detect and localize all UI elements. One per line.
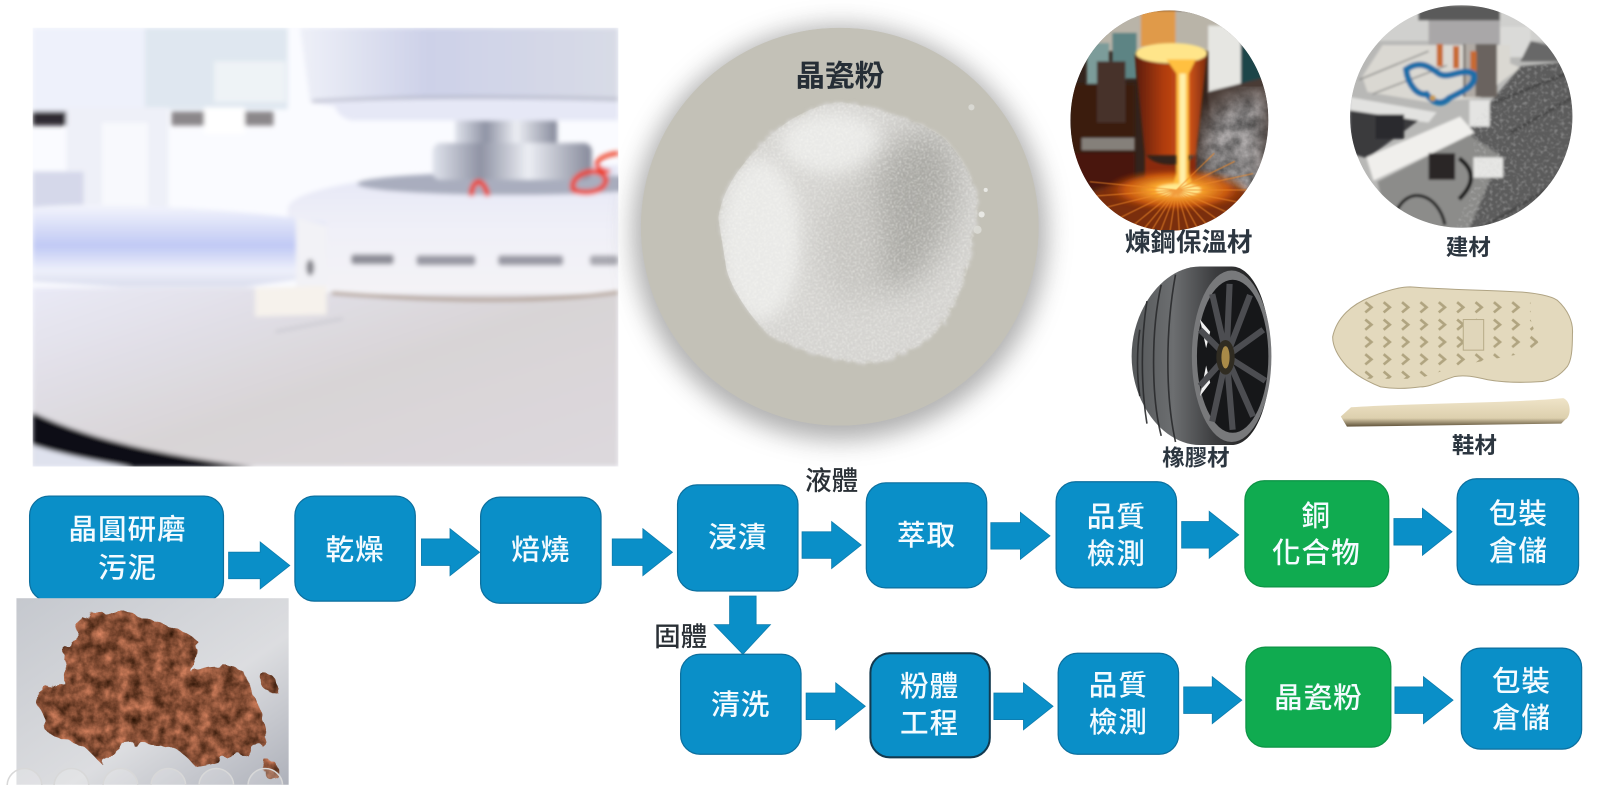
arrow: leaching down to washing	[714, 596, 770, 654]
step: copper compound: 化合物	[1272, 537, 1361, 569]
step: leaching	[678, 485, 798, 591]
photo: CNC machine circle	[1350, 5, 1573, 230]
step: drying: 乾燥	[326, 534, 385, 566]
step: quality inspection upper	[1056, 482, 1177, 588]
step: packaging lower: 倉儲	[1492, 703, 1551, 735]
arrow: crystal powder to packaging	[1395, 677, 1453, 724]
step: quality inspection lower: 品質	[1089, 670, 1148, 702]
step: packaging upper: 倉儲	[1489, 535, 1548, 567]
step: copper compound	[1245, 481, 1389, 587]
step: drying	[295, 496, 415, 601]
sparks	[1090, 153, 1257, 235]
photo: crystal ceramic powder circle	[633, 26, 1047, 440]
step: copper compound: 銅	[1302, 501, 1331, 533]
step: wafer grinding sludge: 污泥	[98, 553, 157, 585]
label: shoe material: 鞋材	[1452, 433, 1497, 458]
label: powder title: 晶瓷粉	[795, 60, 885, 93]
step: packaging lower	[1461, 648, 1582, 749]
arrow: inspection to copper compound	[1182, 511, 1239, 558]
arrow: washing to powder engineering	[806, 683, 865, 730]
step: packaging upper	[1457, 479, 1579, 585]
arrow: roasting to leaching	[612, 529, 672, 576]
step: packaging upper: 包裝	[1489, 499, 1548, 531]
label: rubber material: 橡膠材	[1162, 445, 1230, 470]
label: solid: 固體	[654, 622, 707, 652]
step: quality inspection upper: 品質	[1087, 502, 1146, 534]
step: crystal ceramic powder: 晶瓷粉	[1274, 682, 1363, 714]
label: building material: 建材	[1446, 235, 1491, 260]
photo: shoe sole	[1333, 287, 1573, 427]
arrow: powder engineering to inspection	[994, 683, 1053, 730]
step: extraction: 萃取	[897, 520, 956, 552]
slide viewer toolbar	[7, 769, 283, 785]
step: powder engineering	[870, 653, 990, 757]
step: quality inspection lower	[1058, 653, 1179, 754]
arrow: extraction to inspection	[991, 512, 1050, 559]
step: roasting: 焙燒	[511, 534, 570, 566]
step: wafer grinding sludge	[30, 496, 223, 601]
step: crystal ceramic powder	[1246, 647, 1391, 747]
step: powder engineering: 工程	[900, 708, 959, 740]
step: extraction	[866, 483, 987, 588]
photo: tire	[1132, 266, 1271, 445]
arrow: drying to roasting	[421, 529, 480, 576]
step: washing	[681, 654, 801, 754]
photo: sludge sample	[16, 598, 289, 785]
step: wafer grinding sludge: 晶圓研磨	[68, 514, 187, 546]
photo: steel pouring circle	[1070, 10, 1268, 231]
label: steel insulation: 煉鋼保溫材	[1125, 229, 1253, 257]
step: leaching: 浸漬	[708, 522, 767, 554]
photo: wafer grinding machine	[33, 28, 663, 468]
step: quality inspection upper: 檢測	[1087, 538, 1146, 570]
arrow: sludge to drying	[229, 542, 290, 589]
step: quality inspection lower: 檢測	[1089, 707, 1148, 739]
step: packaging lower: 包裝	[1492, 666, 1551, 698]
step: roasting	[481, 497, 601, 603]
arrow: inspection to crystal powder	[1184, 677, 1242, 724]
arrow: leaching to extraction	[802, 522, 861, 569]
step: powder engineering: 粉體	[900, 671, 959, 703]
label: liquid: 液體	[805, 466, 858, 496]
step: washing: 清洗	[711, 689, 770, 721]
arrow: copper compound to packaging	[1394, 508, 1452, 555]
